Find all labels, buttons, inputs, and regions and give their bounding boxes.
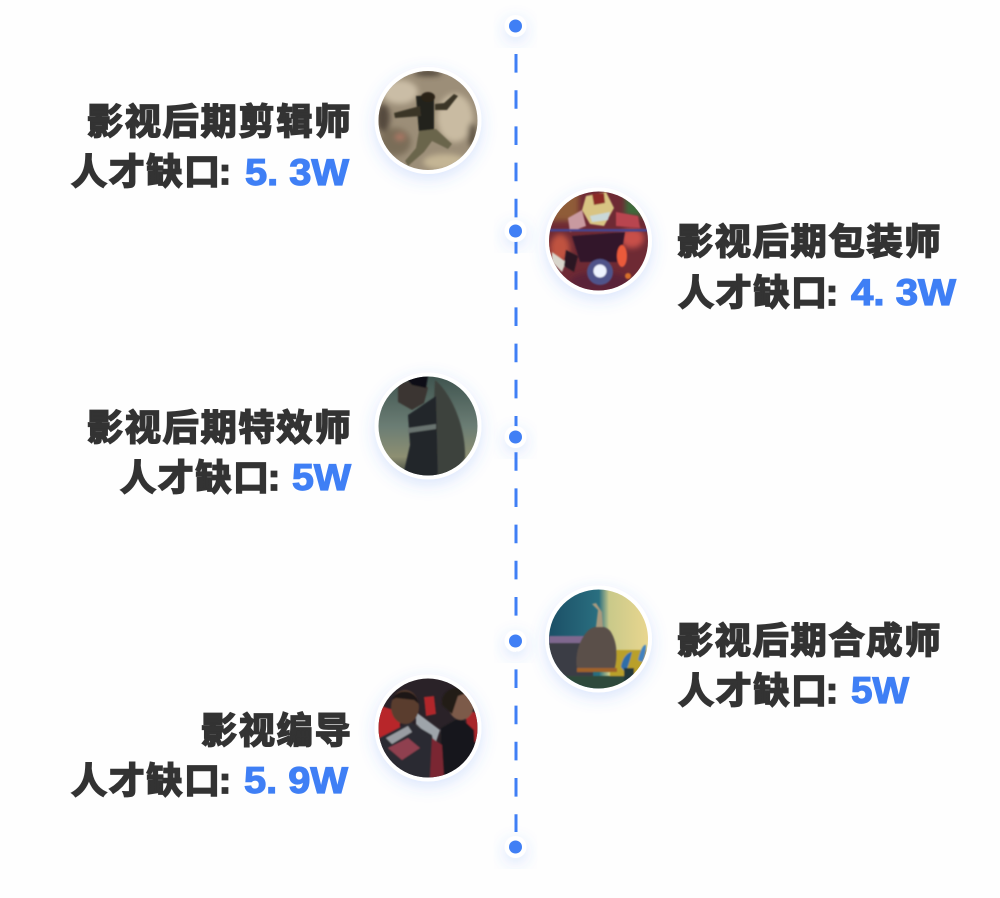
label: 影视后期特效师: 影视后期特效师 (87, 407, 352, 448)
timeline dashed line (514, 54, 518, 832)
label: 影视后期合成师 (677, 620, 942, 711)
timeline dot 1 (504, 15, 526, 37)
shortage value 5.3W (71, 151, 349, 193)
label: 影视后期剪辑师 (71, 101, 352, 193)
shortage value 4.3W (678, 272, 956, 313)
label: 影视后期剪辑师: 影视后期剪辑师 (87, 101, 352, 142)
label: 影视后期特效师 (87, 407, 352, 498)
label: 影视后期包装师 (677, 221, 956, 313)
shortage value 5W: 人才缺口: (678, 670, 840, 711)
shortage value 4.3W: 人才缺口: (678, 272, 840, 313)
portrait 1: astronaut on moon (374, 67, 482, 174)
shortage value 5.3W: 5. 3W (245, 152, 349, 193)
portrait 3: soldier with wing (374, 372, 482, 480)
shortage value 5.9W: 人才缺口: (71, 760, 233, 801)
shortage value 5.9W: 5. 9W (244, 760, 348, 801)
shortage value 5.3W: 人才缺口: (71, 151, 233, 192)
shortage value 5W: 5W (292, 457, 351, 498)
label: 影视后期包装师: 影视后期包装师 (677, 221, 942, 262)
timeline dot 5 (504, 836, 526, 858)
timeline dot 4 (504, 630, 526, 652)
shortage value 5W: 人才缺口: (120, 457, 282, 498)
shortage value 5W: 5W (851, 670, 909, 711)
label: 影视编导 (71, 710, 353, 801)
portrait 5: two heroes (374, 674, 482, 782)
timeline dot 3 (504, 426, 526, 448)
shortage value 5.9W (71, 760, 348, 801)
shortage value 4.3W: 4. 3W (851, 272, 956, 313)
timeline dot 2 (504, 220, 526, 242)
label: 影视编导: 影视编导 (201, 710, 353, 751)
label: 影视后期合成师: 影视后期合成师 (677, 620, 942, 661)
portrait 2: armored hero (545, 188, 652, 294)
portrait 4: bear and birds (545, 586, 652, 692)
